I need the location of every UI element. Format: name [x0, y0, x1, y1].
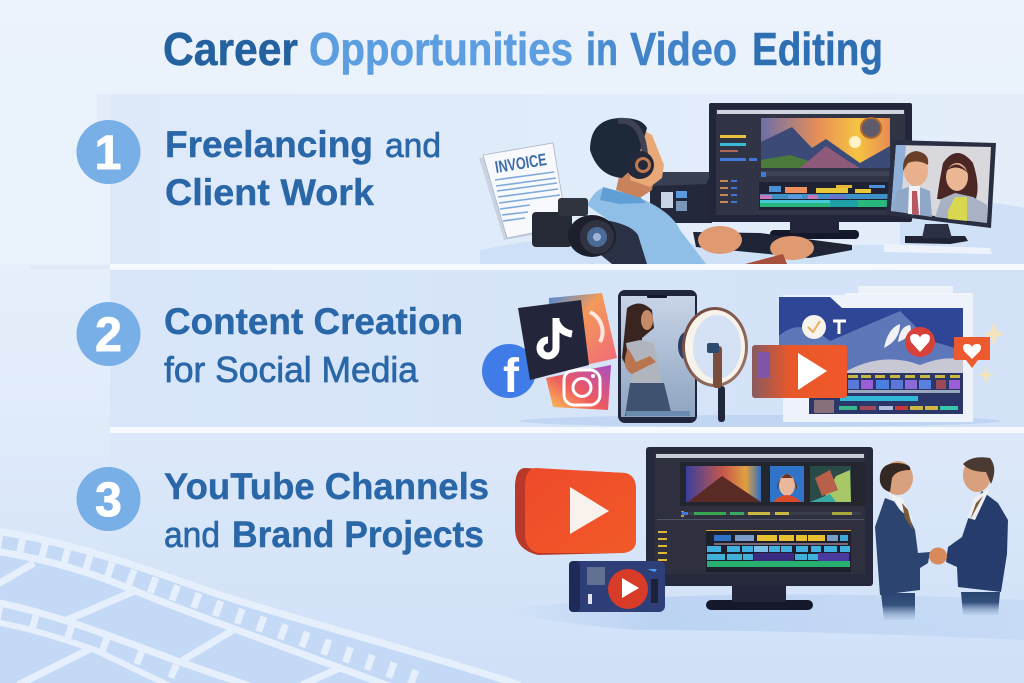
icon: heart notification: [954, 337, 990, 368]
icon: invoice: [479, 143, 567, 240]
icon: orange app card: [548, 293, 617, 364]
number badge 1: [76, 120, 140, 184]
title: in: [586, 23, 618, 75]
thumbnail: portrait: [770, 466, 804, 502]
title: Career: [163, 23, 298, 75]
monitor: editing software: [709, 103, 912, 239]
number badge 3: [76, 467, 140, 531]
heading: youtube channels: YouTube Channels: [164, 466, 489, 507]
heading: content creation: [164, 301, 463, 390]
person: man on screen: [892, 151, 932, 217]
timeline strip: [809, 373, 963, 414]
handshake: [929, 548, 947, 564]
ring light: [678, 307, 748, 422]
icon: youtube logo: [515, 468, 636, 555]
icon: play device: [569, 561, 665, 612]
title: Opportunities: [309, 23, 573, 75]
number badge 2: 2: [95, 309, 122, 362]
chair: [582, 218, 647, 264]
window: editor screen: [779, 286, 973, 422]
thumbnail: mountain: [686, 466, 761, 502]
icon: facebook: f: [503, 350, 520, 403]
phone with creator: [618, 290, 697, 423]
icon: orange play card: [752, 345, 847, 398]
thumbnail: abstract: [810, 466, 851, 502]
heading: freelancing: and: [385, 127, 441, 165]
heading: youtube channels: and: [164, 514, 220, 555]
number badge 2: [76, 302, 140, 366]
person: left businessman: [875, 461, 930, 620]
heading: freelancing: Client Work: [165, 172, 374, 213]
heading: content creation: for Social Media: [164, 349, 419, 390]
icon: facebook: [482, 344, 536, 403]
heading: freelancing: Freelancing: [165, 124, 373, 165]
title: [163, 23, 883, 75]
number badge 1: 1: [95, 127, 121, 180]
heading: content creation: Content Creation: [164, 301, 463, 342]
title: Editing: [752, 23, 883, 75]
illustration: youtube and brand deal: [500, 447, 1024, 640]
keyboard: [693, 232, 852, 258]
monitor: project timeline: [646, 447, 873, 610]
icon: check badge: [802, 315, 846, 339]
icon: tiktok: [518, 300, 589, 380]
icon: desktop unit: [650, 172, 712, 223]
timeline: [759, 182, 890, 210]
heading: freelancing: [165, 124, 441, 213]
person: woman on screen: [935, 153, 987, 223]
timeline clips: [706, 530, 851, 572]
person: editor: [587, 118, 814, 264]
icon: invoice: INVOICE: [494, 150, 548, 177]
icon: heart circle: [905, 327, 935, 357]
icon: instagram: [546, 365, 611, 410]
icon: camera: [532, 198, 616, 257]
monitor: client video call: [884, 140, 996, 254]
illustration: freelancer at desk: [479, 103, 1024, 264]
title: Video: [630, 23, 737, 75]
heading: youtube channels: [164, 466, 489, 555]
film strip decoration: [0, 531, 520, 683]
person: right businessman: [946, 457, 1008, 615]
number badge 3: 3: [95, 474, 122, 527]
heading: youtube channels: Brand Projects: [232, 514, 484, 555]
illustration: social media content: [482, 286, 1004, 427]
icon: sparkles: [978, 322, 1004, 384]
